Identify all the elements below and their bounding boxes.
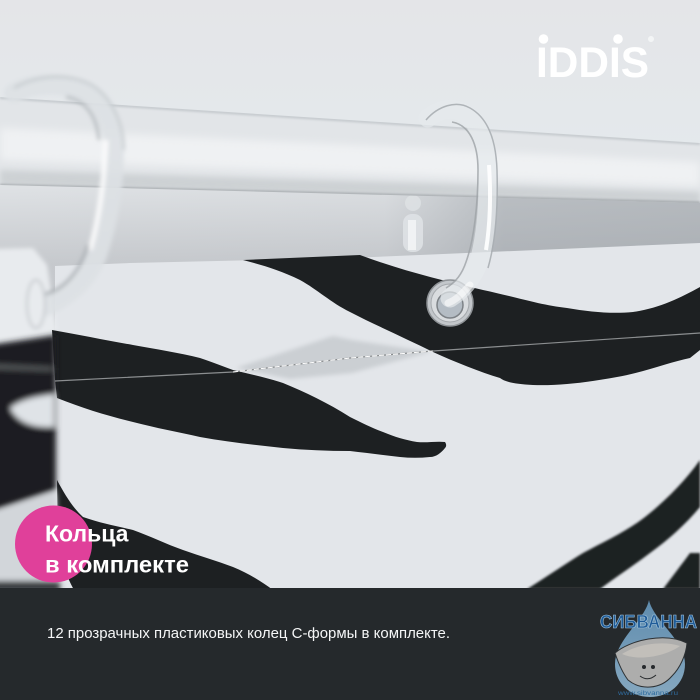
grommet xyxy=(427,280,473,326)
stitch line xyxy=(55,333,700,381)
stripe: upper xyxy=(243,255,700,385)
stripe: lower right xyxy=(527,460,700,589)
seller logo: sibvanna xyxy=(600,600,697,697)
pink circle badge xyxy=(15,506,92,582)
stripe: middle xyxy=(52,330,446,458)
curtain rod xyxy=(0,96,700,204)
small ring behind rod xyxy=(403,195,423,252)
left ring xyxy=(14,77,124,328)
curtain fabric xyxy=(0,243,700,588)
seam band xyxy=(236,336,430,379)
bathtub xyxy=(615,638,687,687)
description text: 12 прозрачных пластиковых колец С-формы в комплекте. xyxy=(47,626,450,642)
badge heading: в комплекте xyxy=(45,552,189,578)
badge heading: Кольца xyxy=(45,520,129,546)
blurred left curtain fold xyxy=(0,335,60,591)
left curtain fold xyxy=(0,248,58,347)
website: www.sibvanna.ru xyxy=(617,690,678,697)
bottom bar xyxy=(0,588,700,700)
tub face xyxy=(640,665,656,679)
right ring xyxy=(426,104,497,303)
background wall xyxy=(0,0,700,350)
brand name: СИБВАННА xyxy=(600,612,697,632)
drop xyxy=(615,600,685,697)
zebra stripes xyxy=(52,255,700,590)
stripe: lower left xyxy=(57,480,273,590)
badge heading xyxy=(45,520,189,578)
logo: iddis: IDDIS xyxy=(536,39,649,87)
stripe: corner right xyxy=(663,553,700,589)
tub rim xyxy=(622,643,680,658)
